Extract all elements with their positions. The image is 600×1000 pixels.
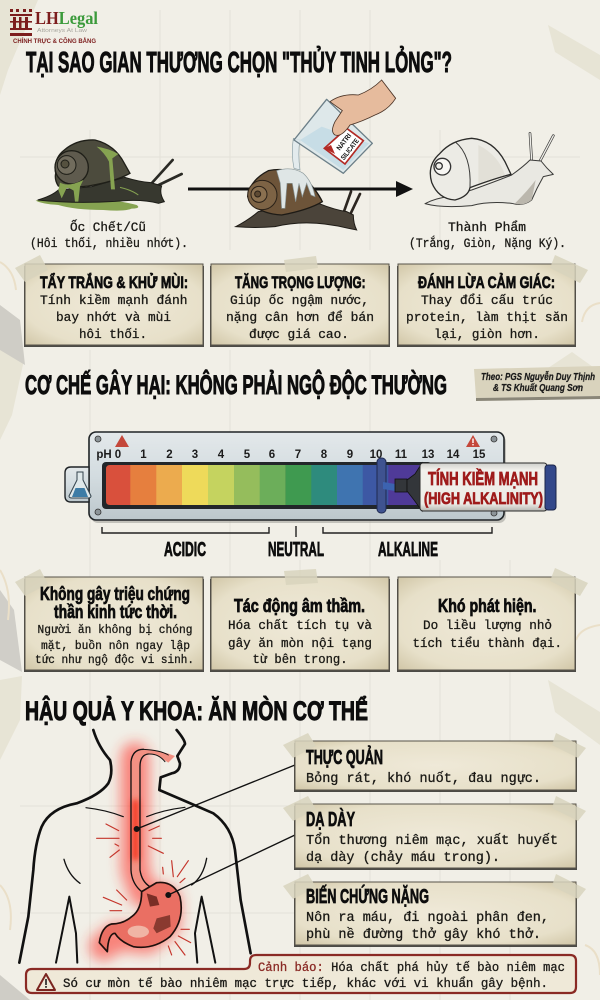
scale numbers: pH: [96, 449, 112, 461]
scale numbers: 15: [473, 449, 486, 461]
body text: [226, 293, 374, 342]
caption: old snail: (Hôi thối, nhiều nhớt).: [30, 236, 188, 251]
panel: severe complications: [283, 874, 586, 947]
scale numbers: 13: [422, 449, 434, 461]
icon: snail being poured with liquid glass: [236, 80, 396, 230]
icon: old slimy snail: [36, 140, 182, 211]
icon: warning triangle: [37, 974, 55, 990]
body text: Thay đổi cấu trúc: [421, 293, 553, 308]
body text: [228, 618, 372, 667]
scale numbers: 2: [166, 449, 173, 461]
callout: warning: [26, 955, 576, 993]
body text: dạ dày (chảy máu trong).: [306, 850, 500, 866]
panel: bleaching and deodorising: [15, 255, 204, 347]
body text: protein, làm thịt săn: [406, 310, 568, 325]
body text: lại, giòn hơn.: [434, 327, 540, 342]
pain rays: [97, 824, 191, 955]
body text: hôi thối.: [79, 327, 147, 342]
heading: Khó phát hiện.: [438, 596, 536, 616]
scale numbers: [96, 449, 486, 461]
body text: từ bên trong.: [252, 652, 348, 667]
body outline: [19, 730, 251, 963]
body text: Bỏng rát, khó nuốt, đau ngực.: [306, 770, 541, 787]
scale numbers: 4: [218, 449, 225, 461]
body text: bay nhớt và mùi: [56, 310, 171, 325]
scale numbers: 8: [321, 449, 328, 461]
body text: tích tiểu thành đại.: [412, 636, 562, 651]
scale numbers: 1: [140, 449, 147, 461]
diagram: human torso with damaged oesophagus and stomach: [19, 730, 295, 963]
scale numbers: 3: [192, 449, 198, 461]
heading: TẨY TRẮNG & KHỬ MÙI:: [40, 273, 188, 292]
icon: white finished snail: [425, 133, 553, 207]
heading: ĐÁNH LỪA CẢM GIÁC:: [418, 273, 555, 292]
marker pen: (HIGH ALKALINITY): [424, 489, 543, 508]
icon: snail being poured with liquid glass: SILICATE: [340, 138, 361, 162]
panel: oesophagus: [283, 733, 586, 792]
label: alkaline: ALKALINE: [378, 539, 438, 561]
logo motto: CHÍNH TRỰC & CÔNG BẰNG: [13, 37, 96, 45]
callout: warning: Só cư mòn tế bào nhiêm mạc trực tiếp, khác với vi khuẩn gây bệnh.: [63, 976, 548, 991]
heading: [40, 584, 190, 622]
caption: old snail: [30, 219, 188, 251]
source note tape: [474, 366, 600, 401]
heading: THỰC QUẢN: [306, 746, 383, 769]
logo wordmark: LHLegal: [35, 8, 98, 28]
panel: stomach: [283, 796, 586, 870]
icon: right warning triangle: [466, 435, 480, 447]
body text: tức như ngộ độc vi sinh.: [35, 653, 194, 667]
panel: no immediate symptoms: [15, 569, 204, 672]
body text: Hóa chất tích tụ và: [228, 618, 372, 633]
slider: [377, 458, 386, 513]
heading: medical consequences: HẬU QUẢ Y KHOA: ĂN MÒN CƠ THỂ: [25, 694, 368, 726]
label: neutral: NEUTRAL: [268, 539, 324, 561]
body text: [306, 910, 549, 943]
label: acidic: ACIDIC: [164, 539, 206, 561]
body text: phù nề đường thở gây khó thở.: [306, 926, 541, 943]
warning text: Cảnh báo: Hóa chất phá hủy tế bào niêm mạc: [258, 960, 565, 975]
scale numbers: 6: [269, 449, 275, 461]
body text: nặng cân hơn để bán: [226, 310, 374, 325]
scale numbers: 7: [295, 449, 301, 461]
body text: [40, 293, 188, 342]
body text: [412, 618, 562, 651]
scale numbers: 14: [447, 449, 460, 461]
panel: increase weight: [210, 256, 390, 347]
body text: Người ăn không bị chóng: [38, 623, 192, 637]
body text: [306, 832, 558, 866]
body text: Nôn ra máu, đi ngoài phân đen,: [306, 910, 549, 926]
oesophagus: [131, 749, 175, 893]
body text: được giá cao.: [249, 327, 349, 342]
body text: gây ăn mòn nội tạng: [228, 636, 372, 651]
body text: Do liều lượng nhỏ: [423, 618, 552, 633]
logo tagline: Attorneys At Law: [37, 28, 88, 34]
scale numbers: 9: [347, 449, 353, 461]
scale numbers: 11: [395, 449, 408, 461]
heading: TĂNG TRỌNG LƯỢNG:: [235, 273, 366, 292]
scale brackets: [102, 526, 492, 537]
label text: natri silicate: NATRI: [336, 133, 353, 152]
marker pen: [383, 463, 556, 511]
icon: law pillars emblem: [10, 9, 32, 36]
logo: LHLegal: [10, 8, 98, 45]
body text: [406, 293, 568, 342]
caption: old snail: Ốc Chết/Cũ: [70, 219, 146, 235]
body text: Giúp ốc ngậm nước,: [230, 293, 369, 308]
scale numbers: 0: [115, 449, 121, 461]
heading: Tác động âm thầm.: [234, 596, 365, 616]
callout line: stomach: [165, 835, 295, 898]
panel: silent impact: [210, 569, 390, 672]
panel: tricking the senses: [397, 255, 588, 347]
arrow: process flow: [188, 181, 413, 197]
heading: DẠ DÀY: [306, 808, 355, 831]
marker text: TÍNH KIỀM MẠNH: [428, 468, 538, 489]
callout line: oesophagus: [134, 765, 295, 832]
scale numbers: 5: [244, 449, 251, 461]
caption: finished product: Thành Phẩm: [448, 220, 526, 235]
body text: [35, 623, 194, 667]
body text: Tổn thương niêm mạc, xuất huyết: [306, 832, 558, 849]
icon: flask tab: [65, 467, 91, 502]
stomach: [99, 882, 181, 952]
caption: finished product: (Trắng, Giòn, Nặng Ký).: [409, 235, 566, 251]
body text: mặt, buồn nôn ngay lập: [41, 639, 190, 653]
panel: hard to detect: [397, 568, 588, 672]
colour bar: [106, 465, 428, 505]
caption: finished product: [409, 220, 566, 251]
heading: thần kinh tức thời.: [54, 602, 177, 622]
body text: Tính kiềm mạnh đánh: [40, 293, 188, 308]
heading: Không gây triệu chứng: [40, 584, 190, 604]
heading: BIẾN CHỨNG NẶNG: [306, 884, 429, 908]
chart: pH scale: [65, 432, 556, 523]
scale numbers: 10: [370, 449, 382, 461]
icon: left warning triangle: [115, 435, 129, 447]
